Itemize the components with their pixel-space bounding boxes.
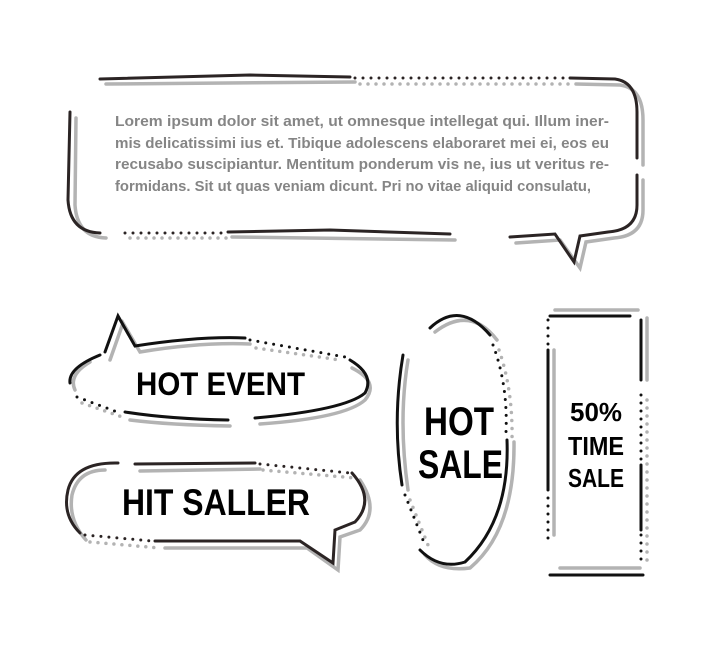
badge: HIT SALLER — [66, 463, 370, 570]
badge: HIT SALLER: HIT SALLER — [122, 482, 310, 523]
panel: text speech bubble — [68, 75, 643, 268]
badge: 50% TIME SALE — [548, 310, 647, 575]
badge: HOT EVENT: HOT EVENT — [136, 366, 305, 402]
badge: 50% TIME SALE: 50% — [570, 397, 622, 427]
badge: HOT SALE: HOT — [424, 400, 494, 444]
body text: Lorem ipsum dolor sit amet, ut omnesque intellegat qui. Illum iner- — [115, 113, 609, 130]
body text: recusabo suscipiantur. Mentitum ponderum vis ne, ius ut veritus re- — [115, 156, 609, 173]
badge: 50% TIME SALE: TIME — [568, 431, 624, 461]
body text: mis delicatissimi ius et. Tibique adolescens elaboraret mei ei, eos eu — [115, 135, 609, 152]
body text: formidans. Sit ut quas veniam dicunt. Pri no vitae aliquid consulatu, — [115, 178, 591, 195]
badge: 50% TIME SALE: SALE — [568, 463, 624, 493]
badge: HOT EVENT — [70, 316, 370, 426]
body text — [115, 113, 609, 195]
badge: HOT SALE — [397, 316, 514, 569]
badge: HOT SALE: SALE — [418, 443, 503, 487]
